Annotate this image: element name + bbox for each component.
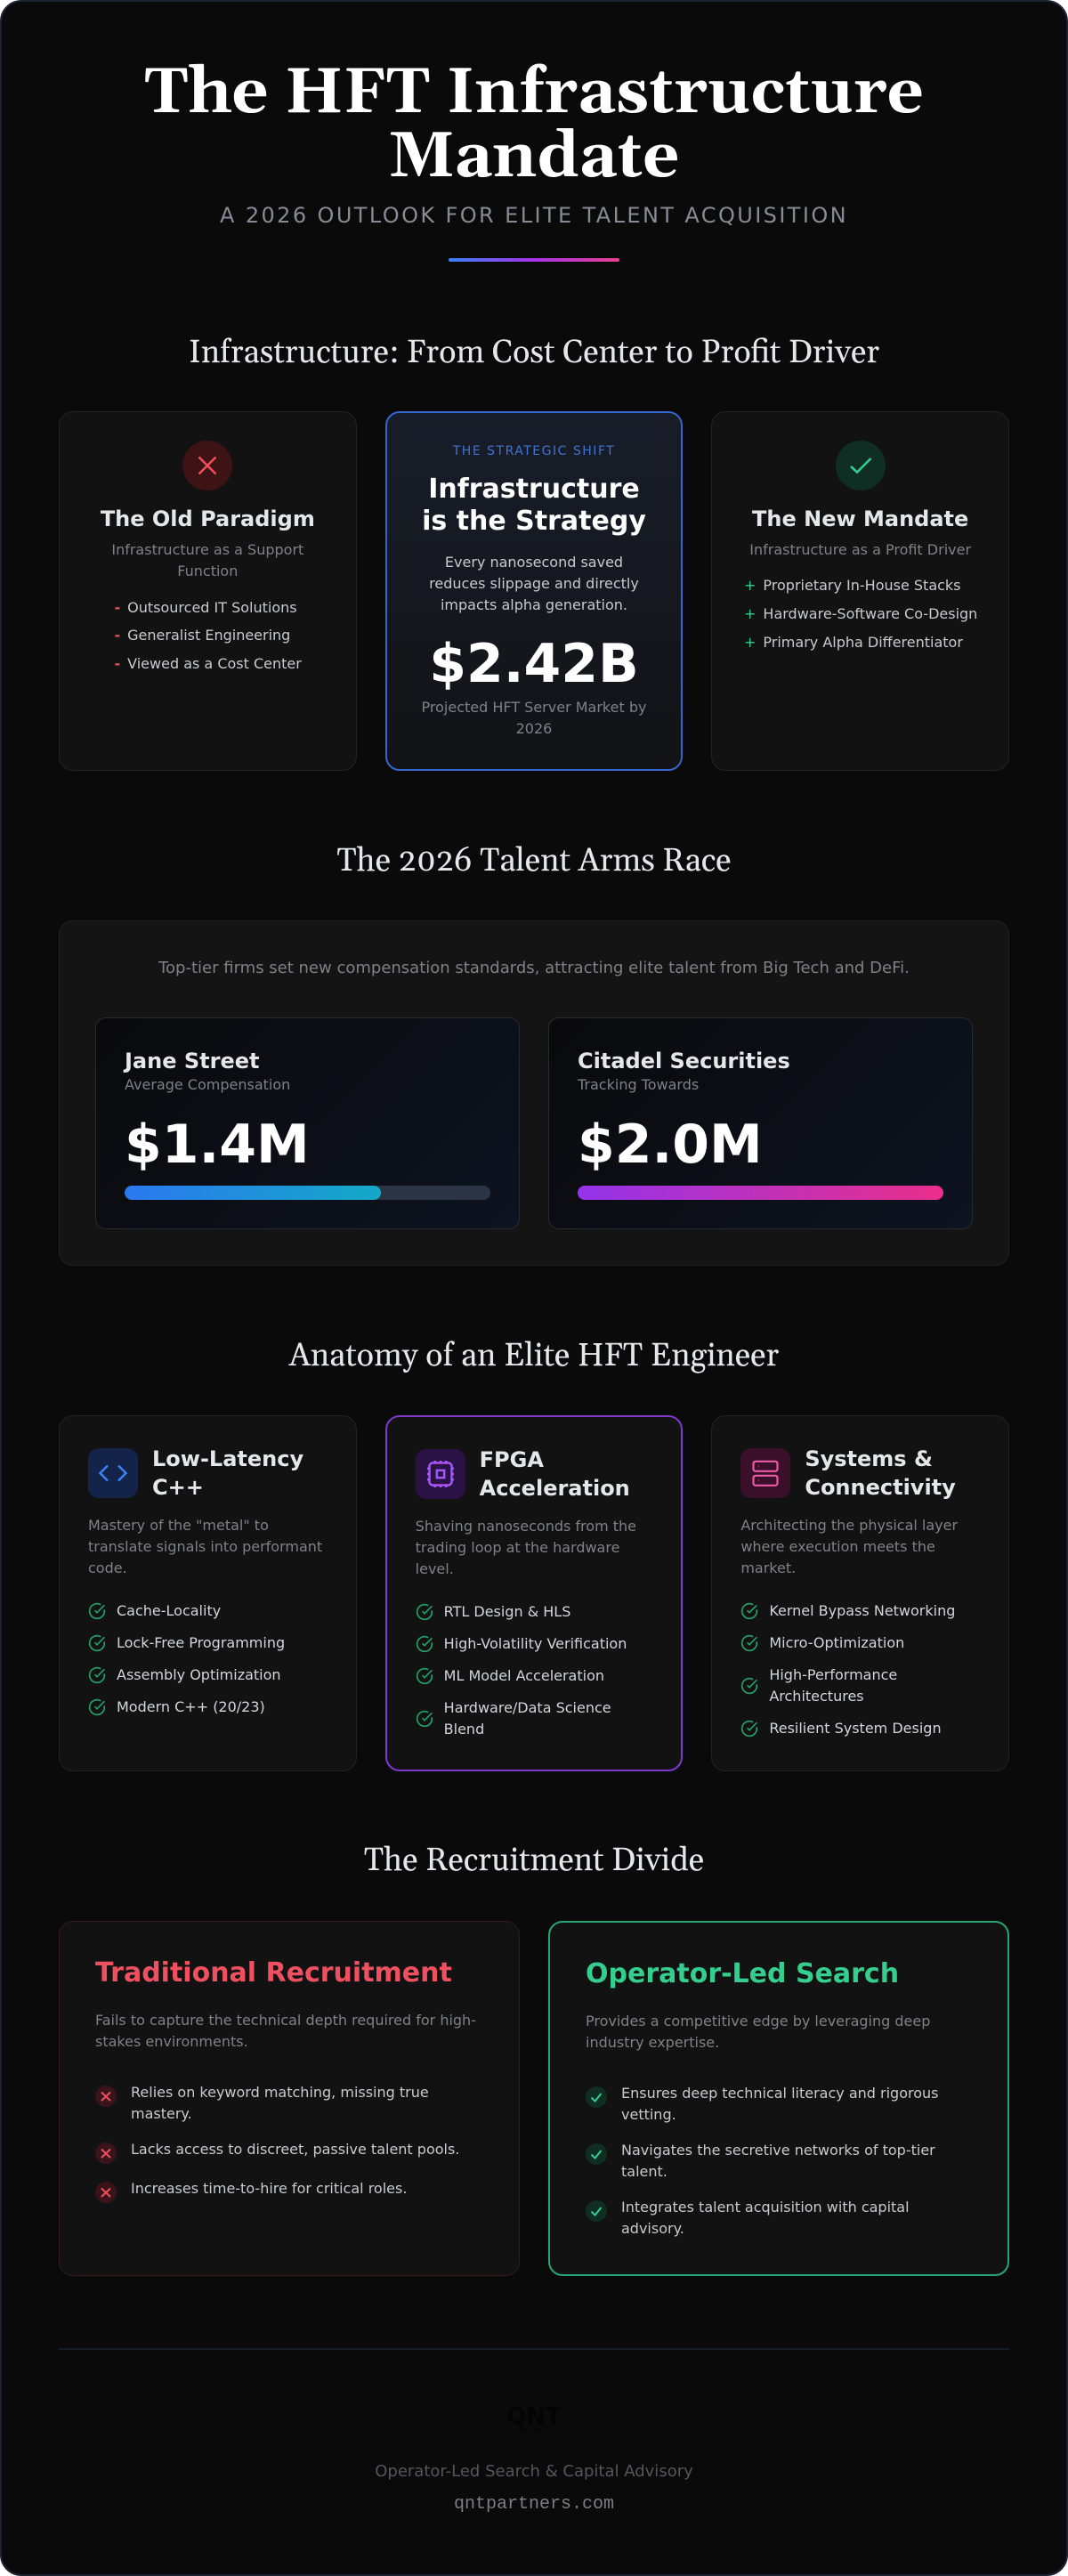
list: new mandate — [744, 577, 977, 651]
value: $1.4M — [125, 1114, 310, 1176]
card title: Traditional Recruitment — [95, 1957, 452, 1989]
panel: fpga acceleration — [385, 1415, 683, 1771]
card title — [422, 474, 646, 537]
description — [740, 1517, 958, 1576]
item 2: Navigates the secretive networks of top-tier — [621, 2142, 935, 2159]
item 2: Lacks access to discreet, passive talent pools. — [131, 2141, 459, 2158]
item 3 — [586, 2199, 910, 2237]
panel: traditional recruitment — [59, 1921, 520, 2276]
description: translate signals into performant — [88, 1538, 322, 1555]
list: old paradigm: - Outsourced IT Solutions — [114, 599, 297, 616]
card title: Infrastructure — [428, 474, 640, 505]
header — [144, 53, 924, 262]
heading: section 1: Infrastructure: From Cost Center to Profit Driver — [189, 334, 879, 374]
card title — [805, 1446, 956, 1500]
firm name: Citadel Securities — [578, 1049, 790, 1073]
item 2: talent. — [621, 2163, 668, 2180]
checklist: RTL Design & HLS — [444, 1603, 570, 1620]
gradient rule — [449, 258, 619, 262]
panel: low-latency c++ — [59, 1415, 357, 1771]
description — [95, 2012, 476, 2050]
panel: operator-led search — [548, 1921, 1009, 2276]
checklist: Kernel Bypass Networking — [769, 1602, 955, 1619]
checklist: ML Model Acceleration — [444, 1667, 604, 1684]
card title — [152, 1446, 303, 1500]
icon: chip — [416, 1449, 465, 1499]
list: old paradigm — [114, 599, 302, 672]
caption: 2026 — [516, 720, 552, 737]
caption — [422, 699, 646, 737]
value: $2.0M — [578, 1114, 763, 1176]
description: level. — [416, 1560, 454, 1577]
item 1: Ensures deep technical literacy and rigorous — [621, 2085, 938, 2102]
title: Mandate — [389, 117, 679, 198]
checklist: Hardware/Data Science — [444, 1699, 611, 1716]
title — [144, 53, 924, 198]
logo — [498, 2403, 570, 2435]
checklist: Resilient System Design — [769, 1720, 942, 1737]
icon: green check — [836, 441, 886, 490]
panel: the strategic shift — [385, 411, 683, 771]
card title: Connectivity — [805, 1475, 956, 1500]
checklist: High-Volatility Verification — [444, 1635, 627, 1652]
list: new mandate: + Hardware-Software Co-Design — [744, 605, 977, 622]
card title: The Old Paradigm — [101, 506, 315, 531]
panel: the new mandate — [711, 411, 1009, 771]
description — [416, 1518, 636, 1577]
stat: $2.42B — [429, 633, 639, 695]
card subtitle — [111, 541, 303, 579]
card title — [479, 1447, 630, 1501]
bar — [125, 1186, 490, 1200]
description: industry expertise. — [586, 2034, 719, 2051]
checklist — [740, 1602, 955, 1738]
checklist: Cache-Locality — [117, 1602, 221, 1619]
card title: Acceleration — [480, 1476, 630, 1501]
list: old paradigm: - Viewed as a Cost Center — [114, 655, 302, 672]
card title: FPGA — [480, 1447, 544, 1472]
description: Every nanosecond saved — [445, 554, 623, 571]
item 3: Increases time-to-hire for critical roles. — [131, 2180, 407, 2197]
eyebrow: THE STRATEGIC SHIFT — [453, 444, 615, 458]
checklist — [89, 1602, 285, 1716]
description — [586, 2013, 930, 2051]
card: citadel securities — [548, 1017, 973, 1229]
item 3: Integrates talent acquisition with capital — [621, 2199, 910, 2216]
description: reduces slippage and directly — [429, 575, 639, 592]
title: The HFT Infrastructure — [144, 53, 924, 134]
checklist: Micro-Optimization — [769, 1634, 904, 1651]
website: qntpartners.com — [454, 2494, 614, 2515]
subtitle: A 2026 OUTLOOK FOR ELITE TALENT ACQUISITION — [220, 203, 848, 228]
item 2 — [95, 2141, 459, 2164]
card title: C++ — [152, 1475, 204, 1500]
card title: Low-Latency — [152, 1446, 303, 1471]
checklist: Modern C++ (20/23) — [117, 1698, 265, 1715]
panel: systems & connectivity — [711, 1415, 1009, 1771]
bar — [578, 1186, 943, 1200]
footer — [59, 2348, 1009, 2517]
card: jane street — [95, 1017, 520, 1229]
item 1: Relies on keyword matching, missing true — [131, 2084, 429, 2101]
list: new mandate: + Primary Alpha Differentiator — [744, 634, 963, 651]
description: market. — [740, 1559, 796, 1576]
card title: Operator-Led Search — [586, 1958, 899, 1989]
description: stakes environments. — [95, 2033, 248, 2050]
card subtitle: Infrastructure as a Support — [111, 541, 303, 558]
description: Fails to capture the technical depth required for high- — [95, 2012, 476, 2029]
description — [429, 554, 639, 613]
icon: red cross — [182, 441, 232, 490]
icon: code — [88, 1448, 138, 1498]
heading: section 3: Anatomy of an Elite HFT Engineer — [289, 1337, 779, 1377]
icon: server — [740, 1448, 790, 1498]
item 3 — [95, 2180, 407, 2203]
item 1: mastery. — [131, 2105, 192, 2122]
description: code. — [88, 1559, 127, 1576]
description: trading loop at the hardware — [416, 1539, 619, 1556]
card title: Systems & — [805, 1446, 933, 1471]
logo: QNT — [506, 2403, 562, 2430]
item 2 — [586, 2142, 935, 2180]
logo: PARTNERS — [516, 2427, 552, 2434]
list: new mandate: + Proprietary In-House Stacks — [744, 577, 961, 594]
panel: talent arms race — [59, 920, 1009, 1266]
caption: Projected HFT Server Market by — [422, 699, 646, 716]
description: Architecting the physical layer — [740, 1517, 958, 1534]
label: Tracking Towards — [578, 1076, 699, 1093]
item 3: advisory. — [621, 2220, 684, 2237]
checklist: High-Performance — [769, 1666, 897, 1683]
description: Provides a competitive edge by leveraging deep — [586, 2013, 930, 2029]
description: where execution meets the — [740, 1538, 935, 1555]
intro text: Top-tier firms set new compensation standards, attracting elite talent from Big Tech and DeFi. — [158, 959, 910, 977]
item 1 — [95, 2084, 429, 2122]
card title: is the Strategy — [422, 506, 646, 537]
checklist: Lock-Free Programming — [117, 1634, 285, 1651]
item 1 — [586, 2085, 938, 2123]
strategic shift text — [422, 444, 646, 737]
card subtitle: Function — [177, 563, 238, 579]
tagline: Operator-Led Search & Capital Advisory — [375, 2462, 693, 2481]
checklist: Assembly Optimization — [117, 1666, 281, 1683]
firm name: Jane Street — [125, 1049, 259, 1073]
card title: The New Mandate — [752, 506, 968, 531]
checklist: Blend — [444, 1721, 484, 1738]
panel: the old paradigm — [59, 411, 357, 771]
description: impacts alpha generation. — [441, 596, 627, 613]
heading: section 4: The Recruitment Divide — [364, 1842, 704, 1882]
old paradigm text — [101, 506, 315, 579]
description — [88, 1517, 322, 1576]
checklist — [417, 1603, 627, 1738]
description: Shaving nanoseconds from the — [416, 1518, 636, 1535]
description: Mastery of the "metal" to — [88, 1517, 269, 1534]
item 1: vetting. — [621, 2106, 676, 2123]
new mandate text — [749, 506, 972, 558]
label: Average Compensation — [125, 1076, 290, 1093]
card subtitle: Infrastructure as a Profit Driver — [749, 541, 971, 558]
heading: section 2: The 2026 Talent Arms Race — [336, 842, 732, 882]
list: old paradigm: - Generalist Engineering — [114, 627, 290, 644]
checklist: Architectures — [769, 1688, 864, 1705]
